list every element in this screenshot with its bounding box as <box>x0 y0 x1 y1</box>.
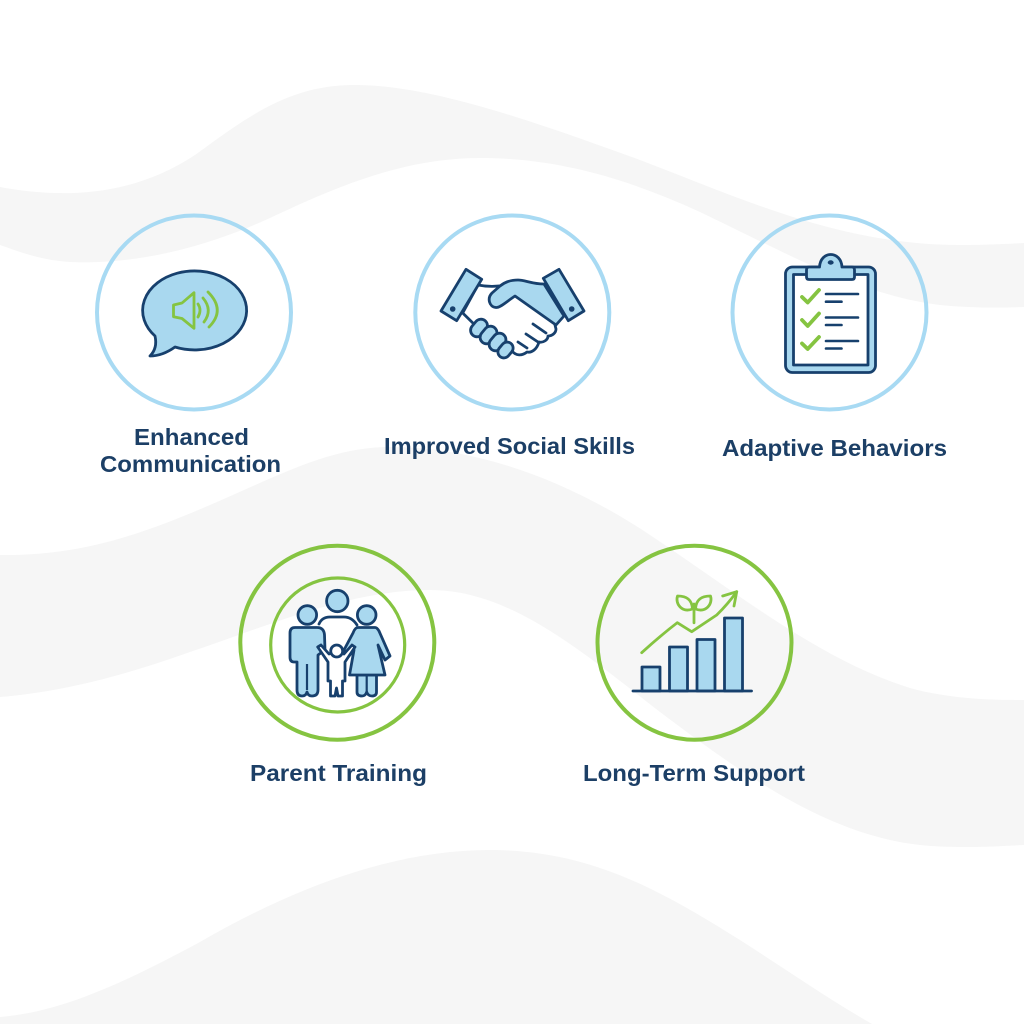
icon: family <box>290 590 390 696</box>
label: Improved Social Skills: Improved Social Skills <box>384 433 635 459</box>
label: Parent Training: Parent Training <box>250 760 427 786</box>
ring: adaptive behaviors <box>732 216 926 410</box>
label: Enhanced Communication <box>100 424 281 477</box>
ring: long-term support <box>598 546 792 740</box>
icon: handshake <box>441 269 584 360</box>
ring: communication <box>97 216 291 410</box>
panel: Long-Term Support <box>583 546 805 786</box>
panel: Adaptive Behaviors <box>722 216 947 461</box>
label: Adaptive Behaviors: Adaptive Behaviors <box>722 435 947 461</box>
icon: growth bar chart with sprout <box>633 592 752 691</box>
ring: parent training outer <box>240 546 434 740</box>
label: Enhanced Communication: Enhanced <box>134 424 249 450</box>
panel: Improved Social Skills <box>384 216 635 459</box>
panel: Enhanced Communication <box>97 216 291 477</box>
icon: clipboard checklist <box>786 254 876 372</box>
label: Enhanced Communication: Communication <box>100 451 281 477</box>
ring: social skills <box>415 216 609 410</box>
label: Long-Term Support: Long-Term Support <box>583 760 805 786</box>
icon: speech bubble with speaker <box>143 271 247 356</box>
panel: Parent Training <box>240 546 434 786</box>
ring: parent training inner <box>271 578 405 712</box>
